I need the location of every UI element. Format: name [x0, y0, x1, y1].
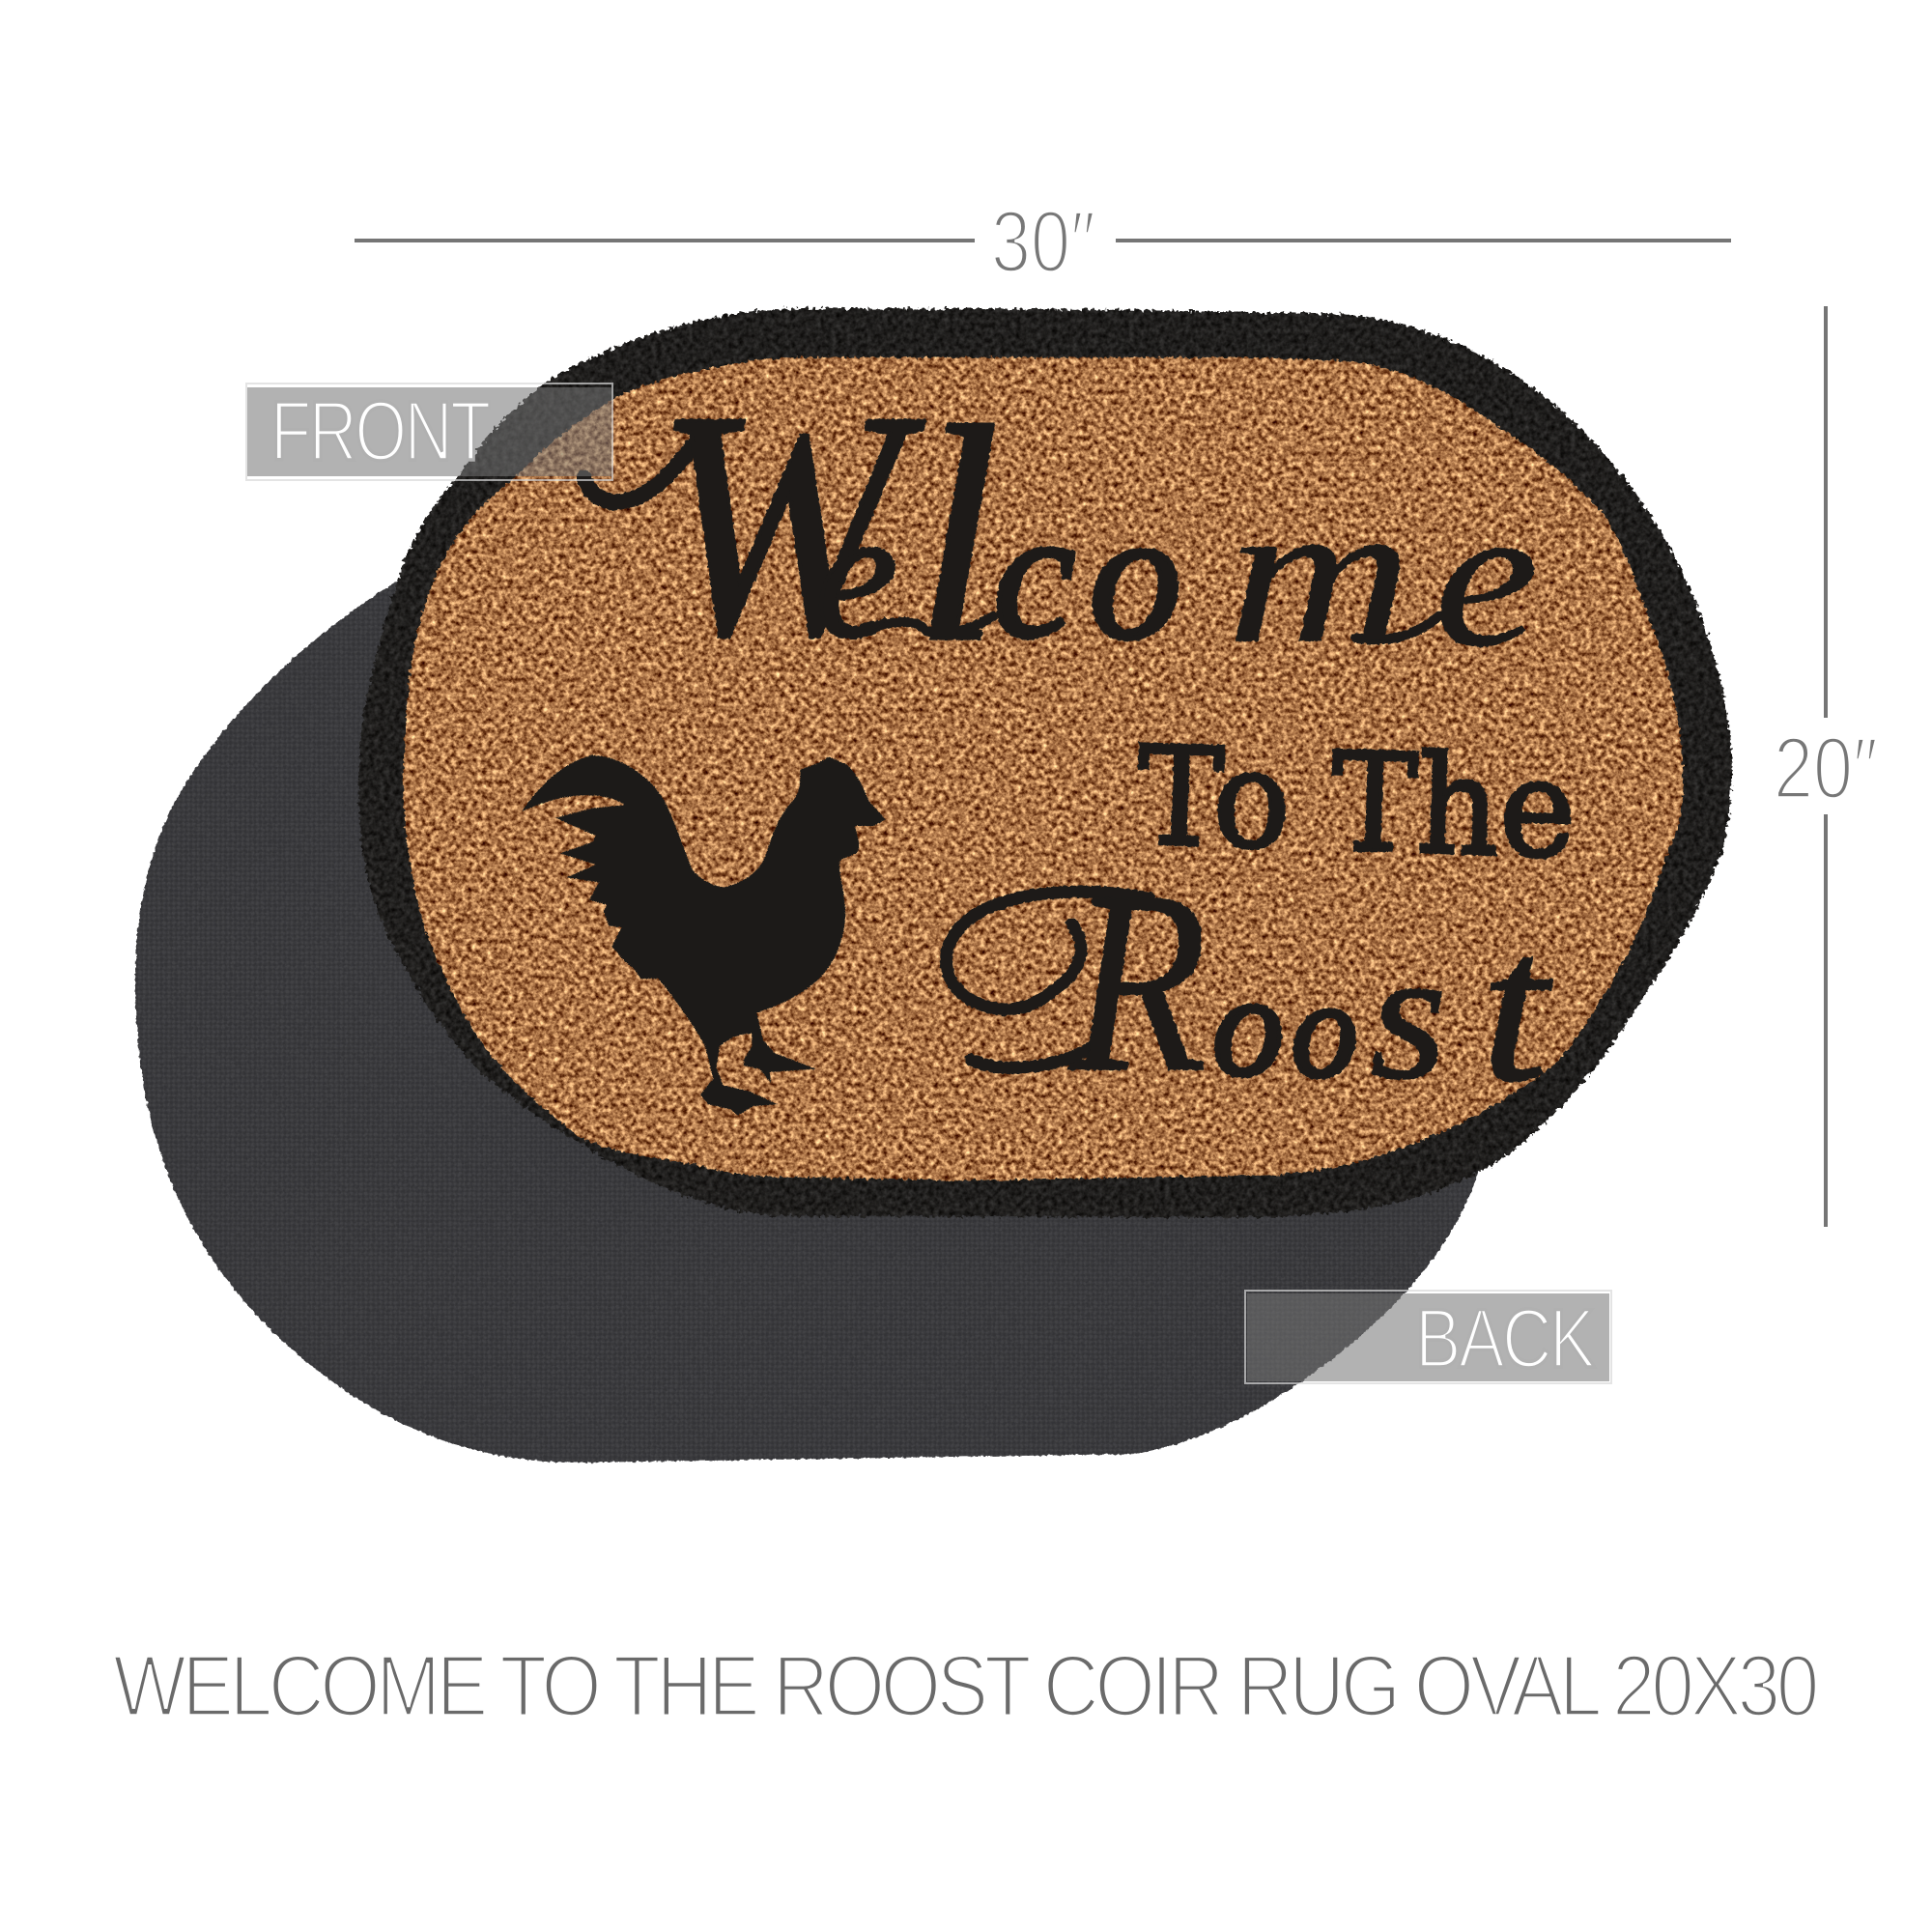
rug back (dark woven oval): [135, 579, 1479, 1463]
word: Welcome: [584, 345, 1539, 705]
word: Roost: s: [1370, 914, 1446, 1118]
word: Welcome: e: [1435, 463, 1539, 689]
word: Roost: t: [1481, 888, 1553, 1126]
printed lettering on the rug: [584, 345, 1578, 1126]
word: Roost: [947, 838, 1553, 1126]
height dimension: 20 inches: 20″: [1774, 721, 1878, 817]
word: Roost: o: [1212, 945, 1284, 1106]
word: Welcome: W: [656, 345, 928, 702]
rug illustration: [135, 308, 1732, 1463]
word: Welcome: c: [993, 472, 1075, 676]
label: BACK: [1245, 1291, 1611, 1385]
height dimension: 20 inches: [1774, 306, 1878, 1227]
rug front black border: [358, 308, 1732, 1217]
word: Roost: o: [1292, 953, 1358, 1106]
width dimension: 30 inches: [355, 194, 1731, 291]
rooster silhouette: [522, 755, 886, 1116]
word: Welcome: e: [815, 472, 897, 676]
label: FRONT: FRONT: [270, 384, 490, 478]
rug front coir field: [403, 357, 1683, 1180]
label: BACK: BACK: [1415, 1293, 1595, 1385]
width dimension: 30 inches: 30″: [991, 194, 1095, 291]
word: Welcome: m: [1227, 459, 1412, 685]
word: Roost: R: [1065, 838, 1208, 1126]
words: To The: To The: [1135, 719, 1578, 890]
word: Welcome: o: [1090, 473, 1181, 677]
word: Welcome: l: [914, 364, 1000, 705]
